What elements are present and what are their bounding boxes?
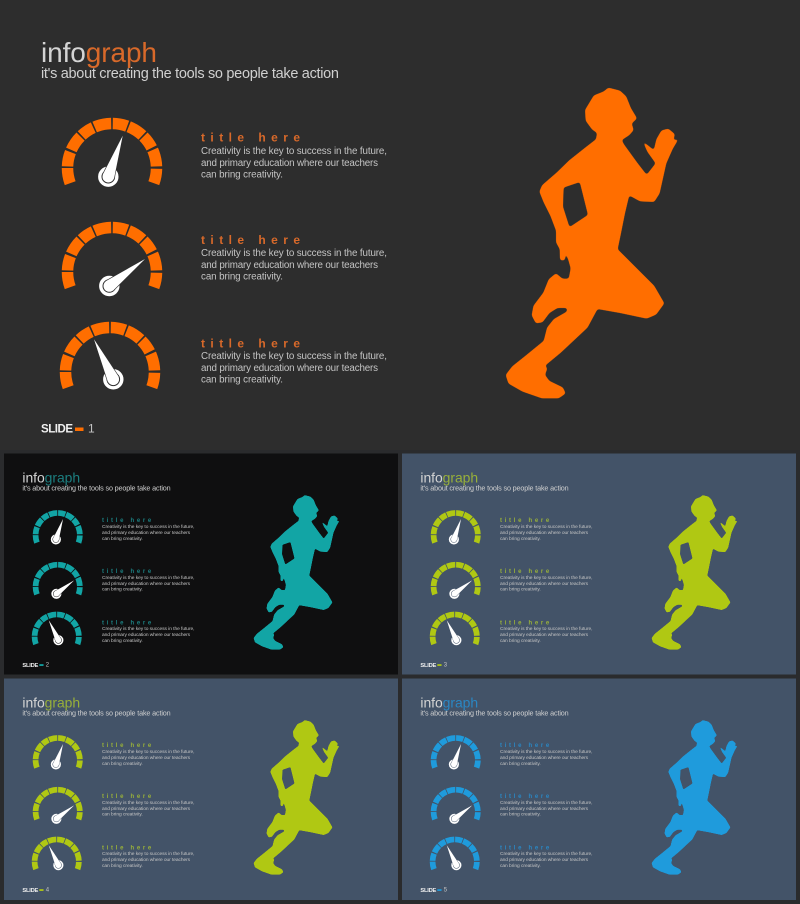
icon: gauge 3 [28,608,85,665]
text block 2: Creativity is the key to success in the future, [500,575,593,581]
text block 2: Creativity is the key to success in the future, [201,248,387,259]
text block 2 [500,569,593,593]
subtitle: it's about creating the tools so people take action [22,708,171,717]
title: infograph [22,469,80,485]
slide number: SLIDE [22,663,38,669]
text block 2: and primary education where our teachers [201,260,378,271]
text block 1 [500,743,593,767]
text block 2: title here [500,794,550,800]
panel: slide 3 [420,469,737,669]
text block 3: title here [102,845,152,851]
text block 3: Creativity is the key to success in the future, [102,851,195,857]
text block 1: Creativity is the key to success in the future, [102,524,195,530]
title: infograph [420,469,478,485]
text block 3: Creativity is the key to success in the future, [500,851,593,857]
icon: gauge 2 [29,558,86,615]
icon: gauge 1 [427,732,484,788]
text block 2: Creativity is the key to success in the future, [102,575,195,581]
text block 2 [102,569,195,593]
text block 2: can bring creativity. [500,587,541,593]
text block 3 [201,336,387,386]
text block 1: Creativity is the key to success in the future, [201,146,387,157]
panel: slide 1 [0,0,800,450]
text block 3 [102,845,195,869]
slide number: 4 [46,888,50,894]
text block 3 [500,620,593,644]
text block 1: title here [102,518,152,524]
panel: slide 5 background [402,678,796,900]
slide number: 2 [46,663,50,669]
text block 1: Creativity is the key to success in the future, [102,749,195,755]
text block 1: can bring creativity. [102,761,143,767]
panel: slide 5 [420,694,737,894]
icon: green runner [254,720,339,875]
text block 3: title here [500,620,550,626]
text block 1 [201,131,387,180]
slide number: 1 [88,422,95,436]
text block 2: and primary education where our teachers [102,806,191,812]
icon: gauge 2 [29,783,86,840]
text block 2: can bring creativity. [102,812,143,818]
icon: gauge 1 [29,507,86,563]
slide number [420,888,448,894]
text block 2: Creativity is the key to success in the future, [102,800,195,806]
text block 3: and primary education where our teachers [500,857,589,863]
text block 1: and primary education where our teachers [102,755,191,761]
text block 1: can bring creativity. [201,170,283,180]
slide number: SLIDE [41,424,73,436]
text block 2 [201,233,387,282]
text block 1: and primary education where our teachers [500,530,589,536]
subtitle: it's about creating the tools so people take action [22,483,171,492]
icon: gauge 2 [55,215,169,329]
text block 2 [500,794,593,818]
icon: orange runner [506,88,678,398]
text block 1: and primary education where our teachers [500,755,589,761]
panel: slide 4 background [4,678,398,900]
panel: slide 3 background [402,454,796,674]
text block 3: can bring creativity. [500,638,541,644]
text block 1 [500,518,593,542]
text block 3: can bring creativity. [102,638,143,644]
text block 2: title here [500,569,550,575]
text block 3: and primary education where our teachers [102,632,191,638]
slide number [22,663,50,669]
slide number [420,663,448,669]
icon: gauge 1 [55,111,169,225]
icon: gauge 3 [28,833,85,890]
icon: gauge 3 [426,833,483,890]
text block 1: can bring creativity. [500,761,541,767]
text block 3: title here [102,620,152,626]
text block 1: title here [201,131,300,145]
icon: gauge 2 [427,783,484,840]
text block 3: Creativity is the key to success in the future, [201,351,387,362]
icon: gauge 3 [53,315,167,429]
icon: green runner [652,495,737,650]
text block 1: can bring creativity. [500,536,541,542]
panel: slide 4 [22,694,339,894]
text block 1: title here [500,743,550,749]
text block 1: and primary education where our teachers [102,530,191,536]
slide number [41,422,95,436]
text block 3: title here [500,845,550,851]
slide number: 5 [444,888,448,894]
text block 2: title here [102,794,152,800]
text block 2: and primary education where our teachers [500,581,589,587]
text block 2: can bring creativity. [201,272,283,282]
text block 3: and primary education where our teachers [500,632,589,638]
icon: gauge 1 [29,732,86,788]
text block 2: and primary education where our teachers [102,581,191,587]
text block 1: can bring creativity. [102,536,143,542]
icon: gauge 2 [427,558,484,615]
title: infograph [22,694,80,710]
slide number: 3 [444,663,448,669]
text block 1: title here [500,518,550,524]
text block 3: and primary education where our teachers [102,857,191,863]
text block 2: and primary education where our teachers [500,806,589,812]
icon: blue runner [652,720,737,875]
text block 3 [500,845,593,869]
text block 2: Creativity is the key to success in the future, [500,800,593,806]
text block 2: title here [201,233,300,247]
icon: teal runner [254,495,339,650]
text block 3: Creativity is the key to success in the future, [102,626,195,632]
text block 3: title here [201,336,300,350]
slide number: SLIDE [420,888,436,894]
title: infograph [41,37,157,68]
text block 3: and primary education where our teachers [201,363,378,374]
panel: slide 2 background [4,454,398,674]
text block 2: title here [102,569,152,575]
text block 2: can bring creativity. [500,812,541,818]
text block 1: and primary education where our teachers [201,158,378,169]
text block 3 [102,620,195,644]
subtitle: it's about creating the tools so people take action [420,483,569,492]
text block 2 [102,794,195,818]
text block 1: Creativity is the key to success in the future, [500,749,593,755]
title: infograph [420,694,478,710]
subtitle: it's about creating the tools so people take action [420,708,569,717]
text block 1: title here [102,743,152,749]
panel: slide 2 [22,469,339,669]
text block 3: Creativity is the key to success in the future, [500,626,593,632]
text block 3: can bring creativity. [500,863,541,869]
slide number [22,888,50,894]
text block 2: can bring creativity. [102,587,143,593]
text block 3: can bring creativity. [102,863,143,869]
slide number: SLIDE [420,663,436,669]
text block 1 [102,518,195,542]
text block 1 [102,743,195,767]
slide number: SLIDE [22,888,38,894]
icon: gauge 3 [426,608,483,665]
text block 3: can bring creativity. [201,374,283,386]
subtitle: it's about creating the tools so people take action [41,66,339,82]
text block 1: Creativity is the key to success in the future, [500,524,593,530]
icon: gauge 1 [427,507,484,563]
